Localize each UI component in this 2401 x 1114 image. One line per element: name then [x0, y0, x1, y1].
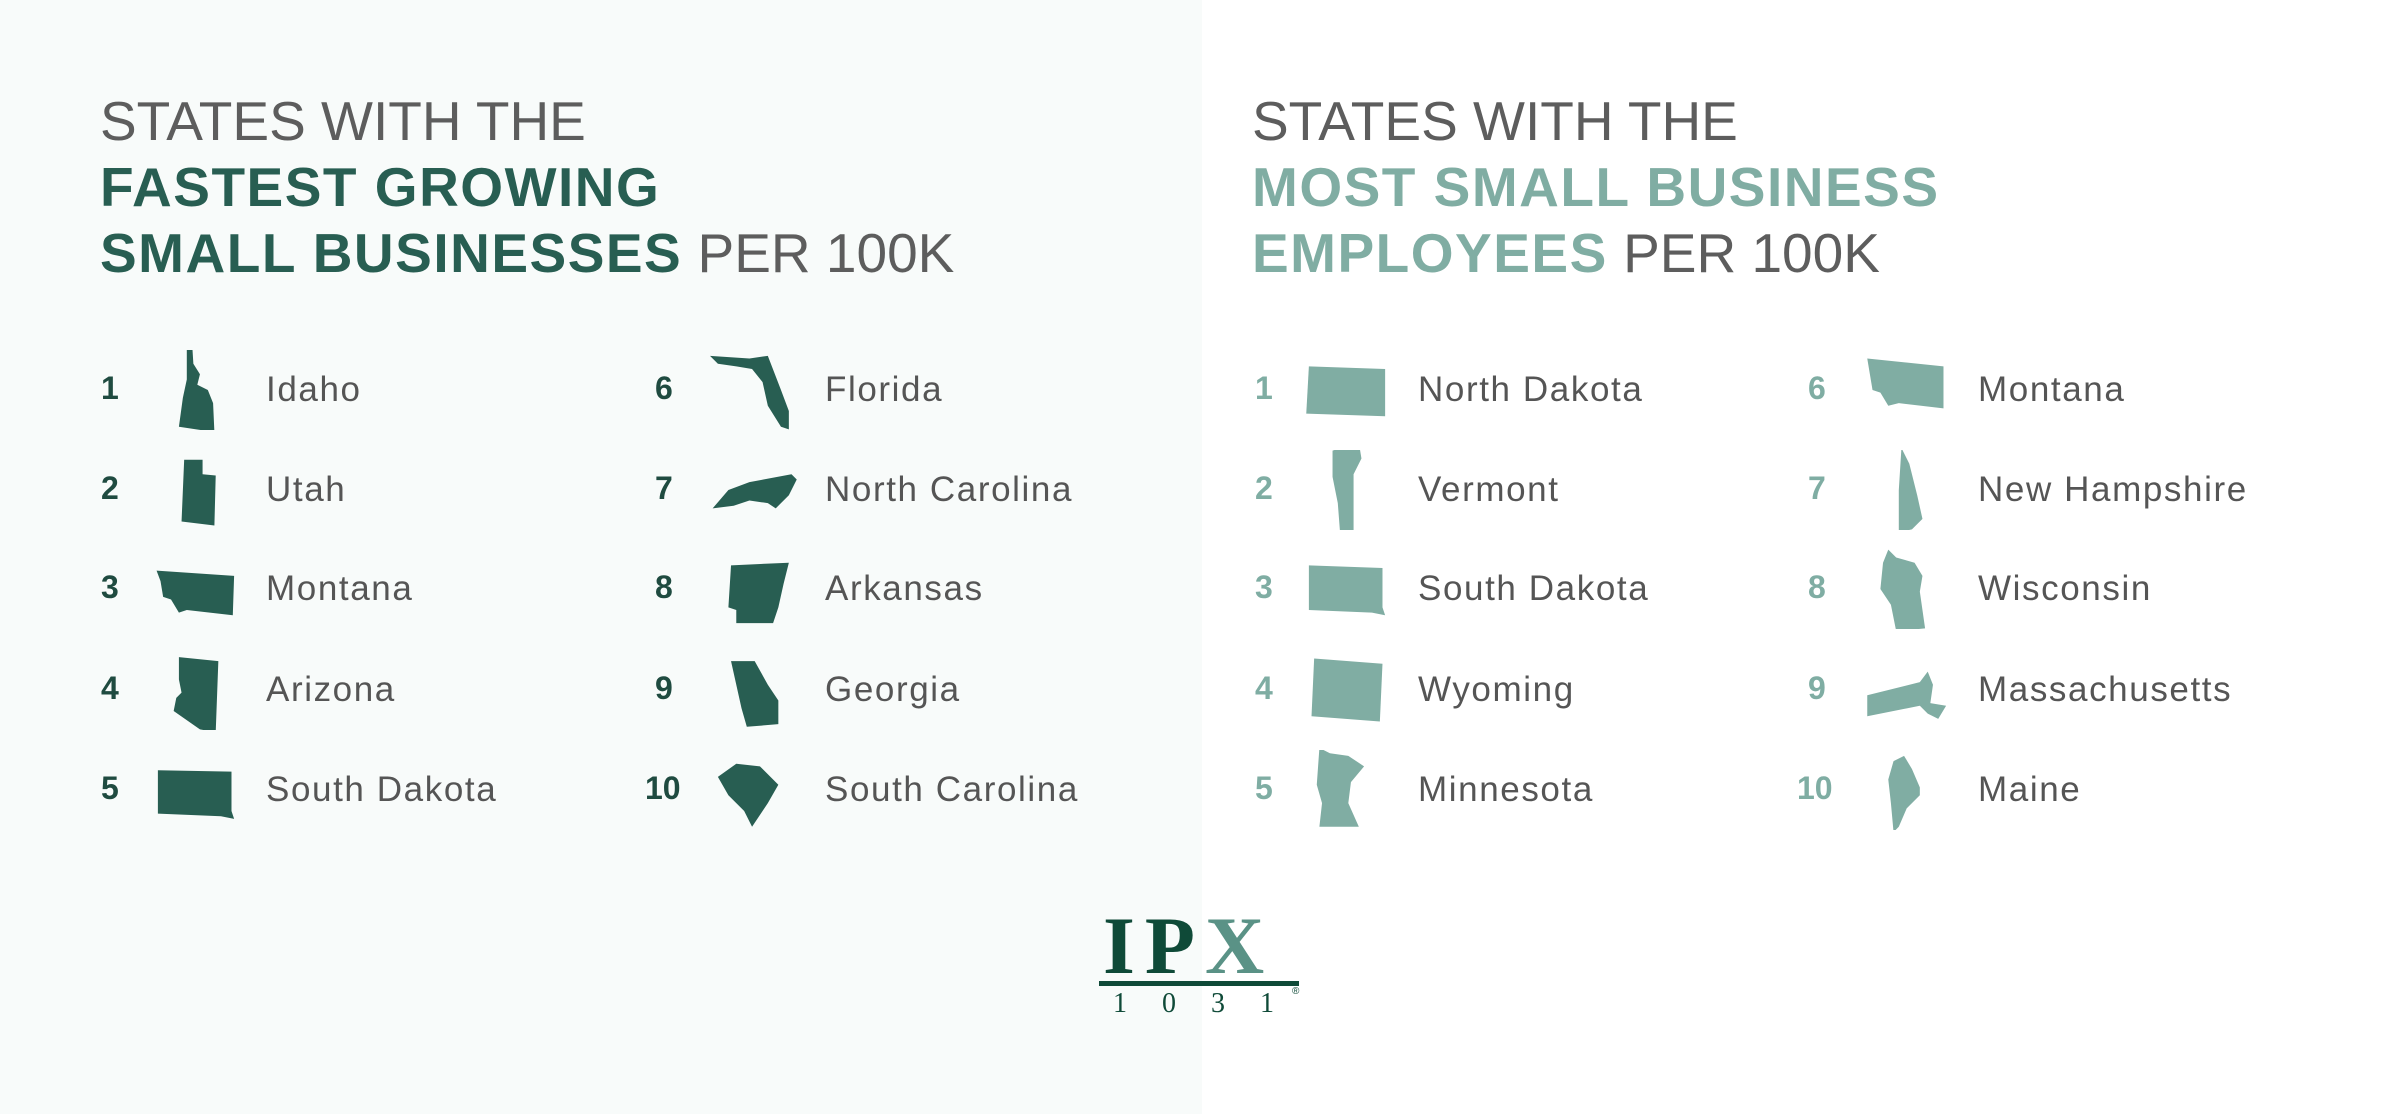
row 5 South Dakota: 5 [101, 770, 119, 806]
row 2 Vermont [1255, 450, 1560, 530]
title: most employees: EMPLOYEES PER 100K [1252, 222, 1880, 284]
row 3 Montana: 3 [101, 569, 119, 605]
row 5 Minnesota: Minnesota [1418, 770, 1594, 809]
row 7 North Carolina: 7 [655, 470, 673, 506]
row 2 Utah [101, 460, 346, 526]
row 4 Wyoming: Wyoming [1418, 670, 1575, 709]
row 3 Montana: Montana [266, 569, 413, 608]
row 5 Minnesota: 5 [1255, 770, 1273, 806]
row 8 Arkansas [655, 562, 984, 624]
title: fastest growing: STATES WITH THE [100, 90, 586, 152]
row 9 Massachusetts: Massachusetts [1978, 670, 2232, 709]
title: fastest growing [100, 90, 954, 284]
title: fastest growing: SMALL BUSINESSES PER 100K [100, 222, 954, 284]
row 7 New Hampshire: 7 [1808, 470, 1826, 506]
row 10 South Carolina: 10 [645, 770, 681, 806]
row 8 Arkansas: Arkansas [825, 569, 984, 608]
row 6 Florida: 6 [655, 370, 673, 406]
row 6 Montana: Montana [1978, 370, 2125, 409]
row 9 Massachusetts [1808, 670, 2232, 719]
row 3 South Dakota [1255, 565, 1649, 616]
row 5 Minnesota [1255, 750, 1594, 827]
row 10 Maine: Maine [1978, 770, 2081, 809]
row 9 Georgia [655, 661, 961, 727]
row 6 Florida [655, 356, 943, 430]
row 2 Utah: Utah [266, 470, 346, 509]
row 4 Wyoming [1255, 658, 1575, 722]
row 4 Arizona: Arizona [266, 670, 396, 709]
title: most employees [1252, 90, 1940, 284]
list: most employees [1255, 358, 2248, 830]
row 3 Montana [101, 569, 413, 616]
row 1 Idaho [101, 350, 362, 430]
row 1 Idaho: 1 [101, 370, 119, 406]
row 1 Idaho: Idaho [266, 370, 362, 409]
row 7 North Carolina: North Carolina [825, 470, 1073, 509]
row 7 North Carolina [655, 470, 1073, 509]
row 10 South Carolina [645, 764, 1079, 827]
title: most employees: MOST SMALL BUSINESS [1252, 156, 1940, 218]
title: fastest growing: FASTEST GROWING [100, 156, 660, 218]
row 3 South Dakota: 3 [1255, 569, 1273, 605]
row 1 North Dakota [1255, 366, 1643, 416]
row 8 Wisconsin: 8 [1808, 569, 1826, 605]
row 2 Vermont: 2 [1255, 470, 1273, 506]
logo: IPX 1031: IPX [1103, 900, 1264, 991]
row 5 South Dakota [101, 770, 497, 819]
row 8 Wisconsin: Wisconsin [1978, 569, 2152, 608]
row 1 North Dakota: North Dakota [1418, 370, 1643, 409]
logo: IPX 1031 [1099, 900, 1309, 1019]
row 9 Georgia: 9 [655, 670, 673, 706]
row 2 Utah: 2 [101, 470, 119, 506]
row 3 South Dakota: South Dakota [1418, 569, 1649, 608]
row 10 Maine: 10 [1797, 770, 1833, 806]
row 4 Wyoming: 4 [1255, 670, 1273, 706]
row 9 Massachusetts: 9 [1808, 670, 1826, 706]
row 10 South Carolina: South Carolina [825, 770, 1079, 809]
row 7 New Hampshire [1808, 450, 2248, 530]
left panel background [0, 0, 1202, 1114]
row 4 Arizona [101, 657, 396, 730]
logo: IPX 1031: 1031 [1113, 988, 1309, 1019]
row 5 South Dakota: South Dakota [266, 770, 497, 809]
row 2 Vermont: Vermont [1418, 470, 1560, 509]
list: fastest growing [101, 350, 1079, 827]
title: most employees: STATES WITH THE [1252, 90, 1738, 152]
row 7 New Hampshire: New Hampshire [1978, 470, 2248, 509]
row 6 Florida: Florida [825, 370, 943, 409]
row 6 Montana [1808, 358, 2125, 409]
row 8 Wisconsin [1808, 550, 2152, 629]
row 6 Montana: 6 [1808, 370, 1826, 406]
row 9 Georgia: Georgia [825, 670, 961, 709]
row 8 Arkansas: 8 [655, 569, 673, 605]
row 1 North Dakota: 1 [1255, 370, 1273, 406]
row 4 Arizona: 4 [101, 670, 119, 706]
row 10 Maine [1797, 756, 2081, 830]
logo: IPX 1031: ® [1292, 986, 1299, 997]
